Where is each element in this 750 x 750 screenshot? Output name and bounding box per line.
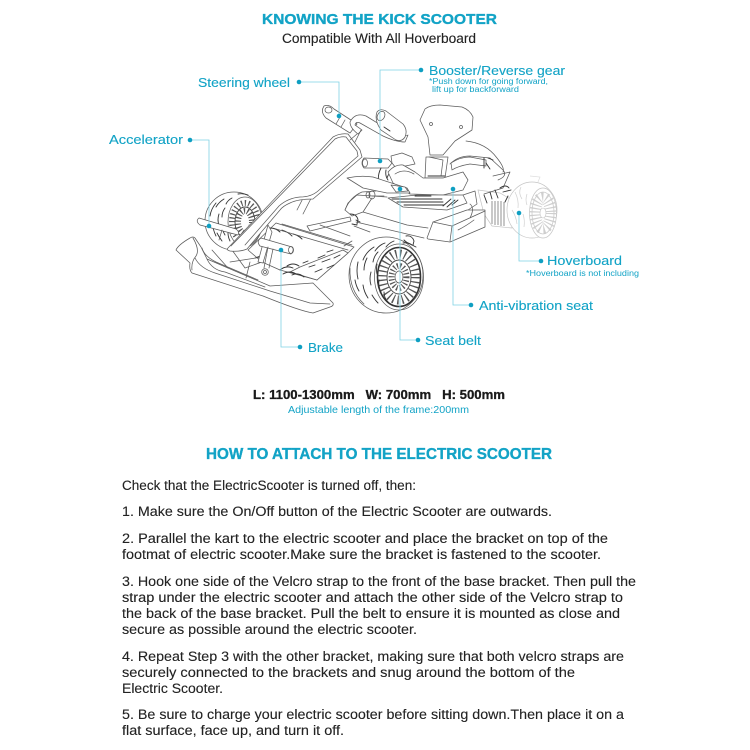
chassis rails bbox=[307, 195, 428, 246]
subtitle: Compatible With All Hoverboard bbox=[282, 31, 476, 46]
step 4: securely connected to the brackets and snug around the bottom of the bbox=[122, 665, 575, 680]
step 4: 4. Repeat Step 3 with the other bracket, making sure that both velcro straps are bbox=[122, 649, 624, 664]
title: KNOWING THE KICK SCOOTER bbox=[262, 11, 497, 28]
step 1: 1. Make sure the On/Off button of the Electric Scooter are outwards. bbox=[122, 504, 552, 519]
step 5: 5. Be sure to charge your electric scooter before sitting down.Then place it on a bbox=[122, 707, 625, 722]
rear chassis box bbox=[427, 204, 485, 242]
adjustable length note: Adjustable length of the frame:200mm bbox=[288, 404, 469, 416]
callout: seat belt: Seat belt bbox=[425, 333, 481, 348]
callout: anti-vibration seat bbox=[451, 187, 593, 313]
steering wheel bbox=[322, 105, 408, 142]
step 3: the back of the base bracket. Pull the belt to ensure it is mounted as close and bbox=[122, 606, 620, 621]
callout: hoverboard: *Hoverboard is not including bbox=[526, 269, 639, 278]
callout: accelerator: Accelerator bbox=[109, 132, 184, 147]
left armrest bbox=[347, 176, 410, 193]
front right wheel bbox=[349, 236, 424, 313]
brake pedal bbox=[258, 238, 294, 268]
callout: hoverboard: Hoverboard bbox=[547, 253, 622, 268]
step 4 bbox=[122, 649, 624, 696]
callout: anti-vibration seat: Anti-vibration seat bbox=[479, 298, 593, 313]
floor plate bbox=[388, 191, 477, 210]
step 3: 3. Hook one side of the Velcro strap to the front of the base bracket. Then pull the bbox=[122, 574, 636, 589]
seat base bbox=[388, 165, 468, 195]
callout: brake bbox=[279, 248, 343, 355]
callout: booster reverse gear: Booster/Reverse gear bbox=[429, 63, 566, 78]
callout: booster reverse gear: *Push down for going forward, bbox=[429, 77, 548, 86]
callout: booster reverse gear bbox=[378, 63, 566, 163]
callout: steering wheel: Steering wheel bbox=[198, 75, 290, 90]
steering column and hood bbox=[227, 134, 362, 251]
callout: seat belt bbox=[398, 187, 481, 348]
step 5: flat surface, face up, and turn it off. bbox=[122, 723, 344, 738]
callout: accelerator bbox=[109, 132, 211, 228]
step 4: Electric Scooter. bbox=[122, 681, 223, 696]
floor board and pedals frame bbox=[212, 223, 354, 280]
booster tube bbox=[362, 153, 415, 183]
step 3: secure as possible around the electric scooter. bbox=[122, 622, 417, 637]
seat rail loop bbox=[450, 141, 511, 203]
front left wheel bbox=[205, 192, 263, 250]
kart illustration bbox=[176, 105, 557, 313]
step 3 bbox=[122, 574, 636, 637]
accelerator pedal bbox=[197, 218, 239, 240]
step 5 bbox=[122, 707, 625, 738]
heading: how to attach: HOW TO ATTACH TO THE ELECTRIC SCOOTER bbox=[206, 446, 552, 463]
step 2: footmat of electric scooter.Make sure the bracket is fastened to the scooter. bbox=[122, 547, 601, 562]
callout: hoverboard bbox=[517, 211, 639, 278]
callout: brake: Brake bbox=[308, 340, 343, 355]
seat back bbox=[420, 105, 473, 178]
dimensions: L: 1100-1300mm W: 700mm H: 500mm bbox=[253, 388, 505, 402]
callout: booster reverse gear: lift up for backforward bbox=[432, 85, 519, 94]
instructions text bbox=[122, 478, 636, 738]
callout: steering wheel bbox=[198, 75, 341, 118]
hoverboard motor and wheel bbox=[478, 176, 557, 238]
step 2: 2. Parallel the kart to the electric scooter and place the bracket on top of the bbox=[122, 531, 608, 546]
instructions text: Check that the ElectricScooter is turned off, then: bbox=[122, 478, 416, 493]
step 3: strap under the electric scooter and attach the other side of the Velcro strap to bbox=[122, 590, 623, 605]
bumper bbox=[176, 237, 333, 313]
seat side rail bbox=[345, 191, 384, 210]
step 2 bbox=[122, 531, 608, 562]
